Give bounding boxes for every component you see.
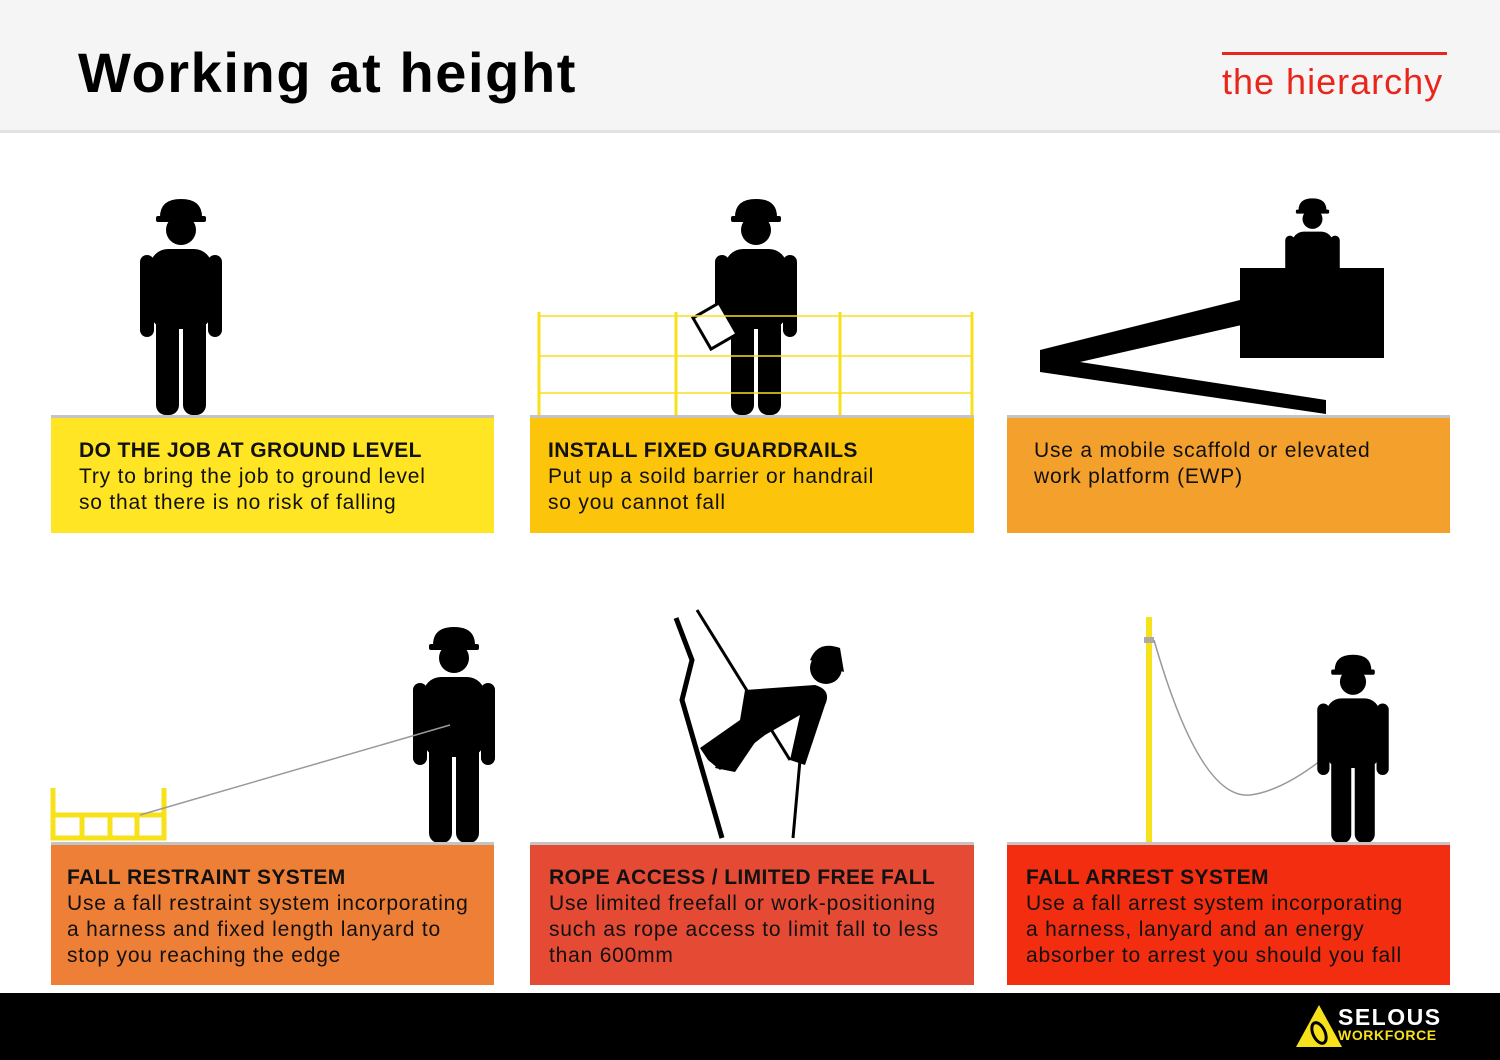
panel: fall restraint: Use a fall restraint system incorporating: [67, 892, 469, 915]
icon: fall restraint: [53, 627, 495, 843]
icon: worker behind guardrail: [539, 199, 972, 415]
footer: [0, 993, 1500, 1060]
panel: ground level: [51, 415, 494, 533]
panel: ground level: so that there is no risk of falling: [79, 491, 396, 514]
panel: fall restraint: [51, 842, 494, 985]
panel: fall arrest: absorber to arrest you should you fall: [1026, 944, 1402, 967]
panel: fall restraint: a harness and fixed length lanyard to: [67, 918, 441, 941]
panel: fall arrest: FALL ARREST SYSTEM: [1026, 866, 1269, 889]
panel: fall restraint: stop you reaching the edge: [67, 944, 341, 967]
panel: rope access: such as rope access to limit fall to less: [549, 918, 939, 941]
panel: rope access: Use limited freefall or work-positioning: [549, 892, 936, 915]
panel: scaffold: work platform (EWP): [1034, 465, 1243, 488]
panel: guardrails: [530, 415, 974, 533]
panel: scaffold: Use a mobile scaffold or elevated: [1034, 439, 1371, 462]
panel: guardrails: Put up a soild barrier or handrail: [548, 465, 874, 488]
icon: rope access: [676, 610, 844, 838]
panel: ground level: Try to bring the job to ground level: [79, 465, 426, 488]
title: Working at height: [78, 41, 577, 104]
icon: elevated work platform: [1040, 198, 1384, 414]
header: [0, 0, 1500, 133]
panel: fall arrest: [1007, 842, 1450, 985]
panel: ground level: DO THE JOB AT GROUND LEVEL: [79, 439, 422, 462]
logo: SELOUS: [1338, 1004, 1442, 1030]
panel: guardrails: INSTALL FIXED GUARDRAILS: [548, 439, 858, 462]
panel: scaffold: [1007, 415, 1450, 533]
logo: [1296, 1004, 1442, 1047]
panel: guardrails: so you cannot fall: [548, 491, 726, 514]
panel: fall arrest: a harness, lanyard and an energy: [1026, 918, 1364, 941]
panel: fall restraint: FALL RESTRAINT SYSTEM: [67, 866, 346, 889]
icon: fall arrest: [1144, 617, 1389, 843]
subtitle: the hierarchy: [1222, 61, 1443, 102]
panel: rope access: [530, 842, 974, 985]
logo: WORKFORCE: [1338, 1027, 1437, 1043]
icon: worker at ground level: [140, 199, 222, 415]
panel: rope access: ROPE ACCESS / LIMITED FREE FALL: [549, 866, 935, 889]
panel: fall arrest: Use a fall arrest system incorporating: [1026, 892, 1403, 915]
panel: rope access: than 600mm: [549, 944, 674, 967]
